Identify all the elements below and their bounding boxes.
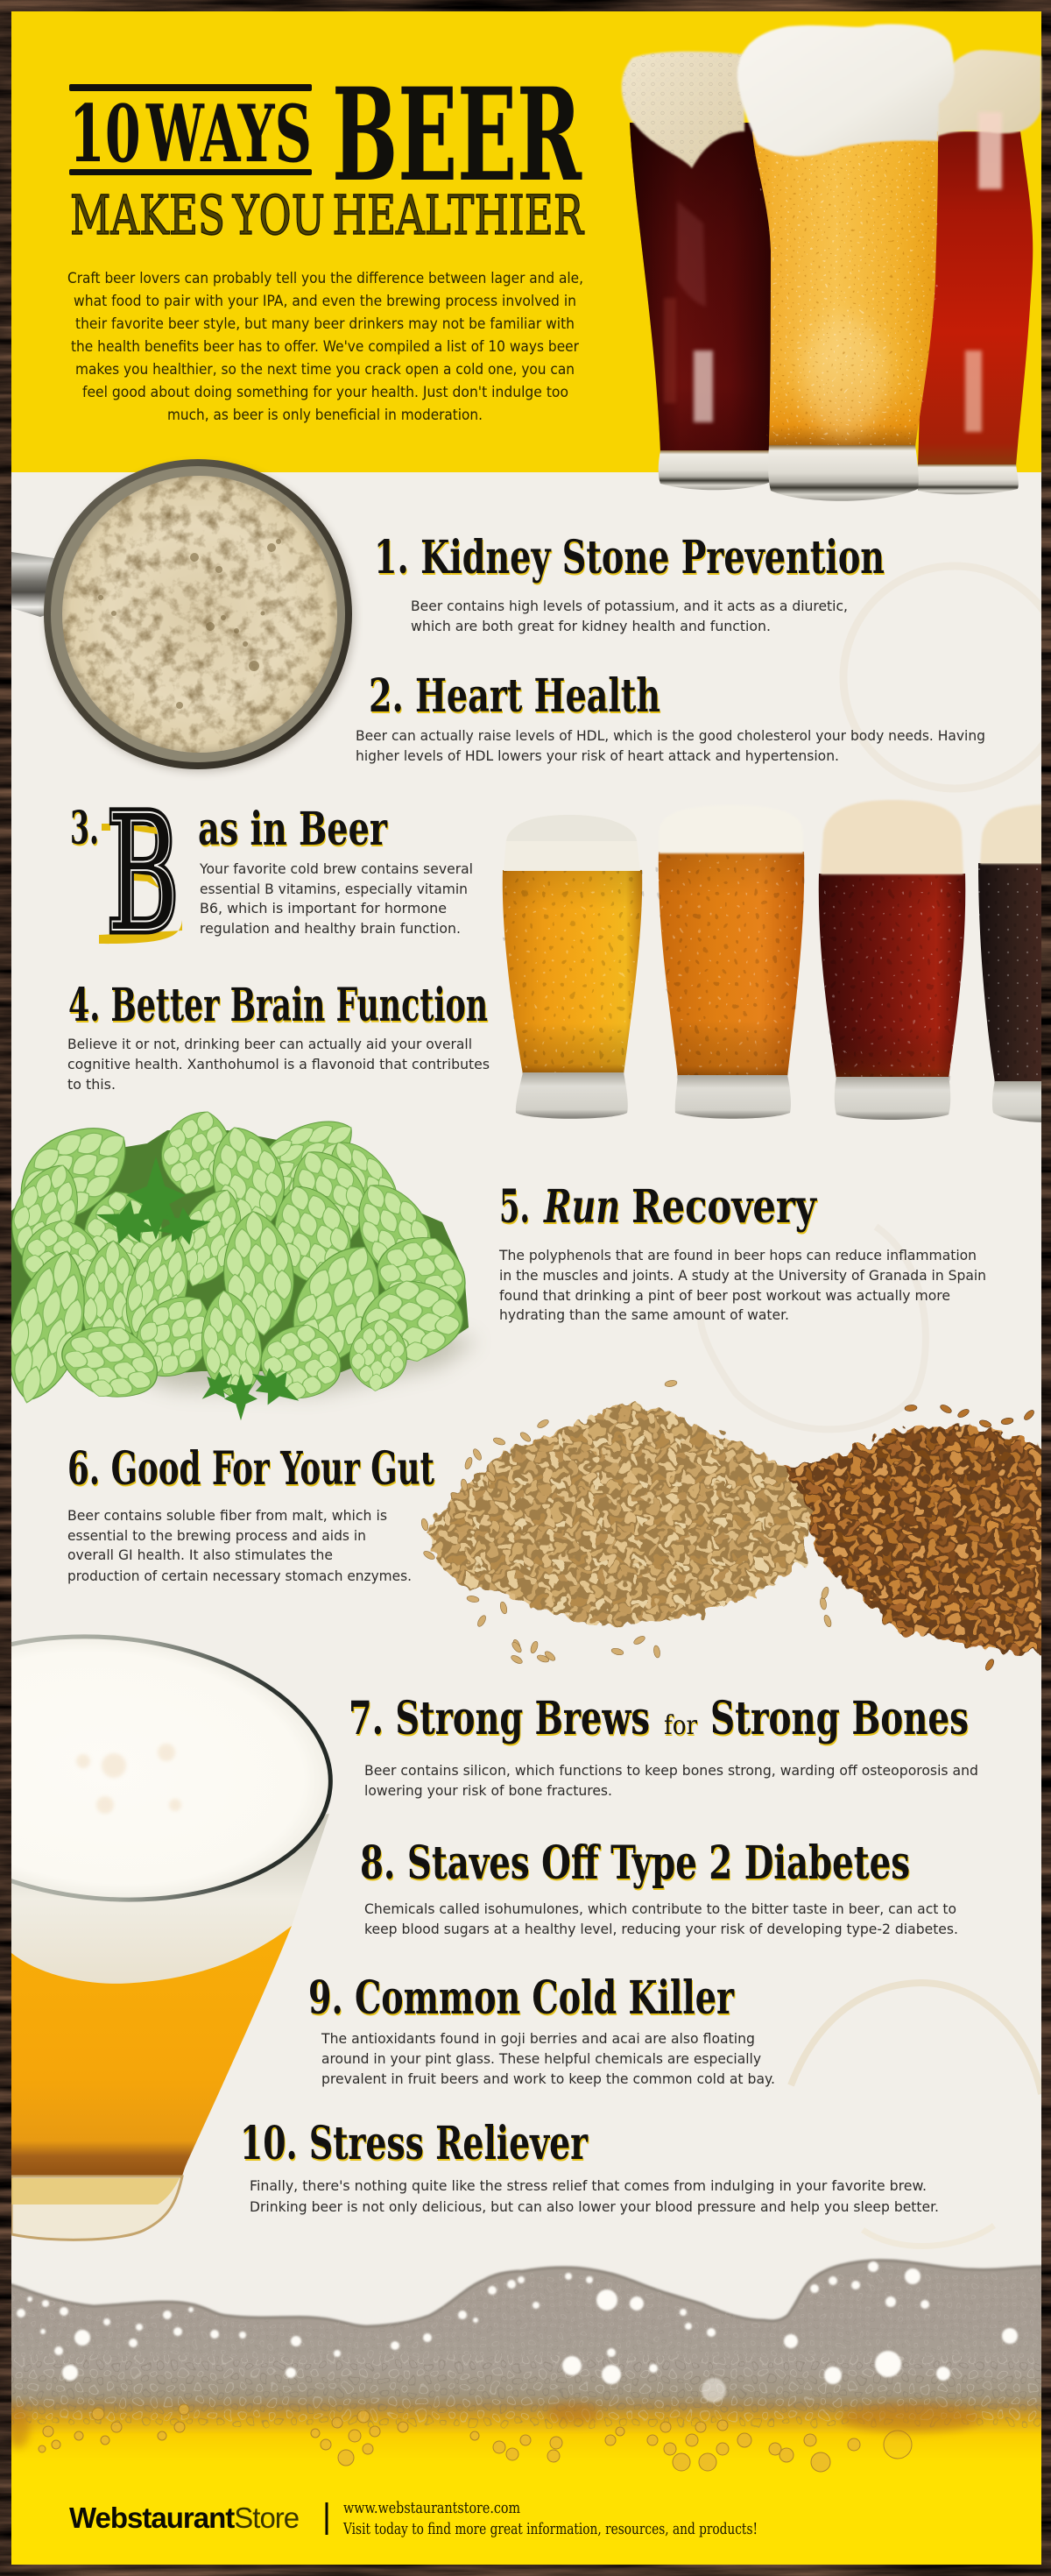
- body 3: essential B vitamins, especially vitamin: [200, 881, 468, 897]
- mug from above: [11, 459, 355, 772]
- orange glass: [655, 852, 805, 1119]
- foam warm specks: [76, 1744, 181, 1814]
- heading 9: 9. Common Cold Killer: [308, 1971, 734, 2025]
- big letter B: B: [107, 781, 179, 968]
- heading 4: 4. Better Brain Function: [68, 979, 488, 1032]
- heading 3 number: 3.: [70, 802, 99, 855]
- intro paragraph: makes you healthier, so the next time you crack open a cold one, you can: [75, 361, 575, 379]
- body 8: Chemicals called isohumulones, which contribute to the bitter taste in beer, can act to: [364, 1900, 956, 1917]
- row of four beer glasses: [503, 800, 1051, 1122]
- body 3: regulation and healthy brain function.: [200, 920, 461, 937]
- body 5: in the muscles and joints. A study at the University of Granada in Spain: [499, 1267, 986, 1284]
- body 7: [364, 1762, 978, 1799]
- foam and beer gradient: [0, 2261, 1051, 2576]
- scattered grains: [420, 1379, 1035, 1672]
- heading 5: 5.: [499, 1180, 530, 1234]
- footer url: www.webstaurantstore.com: [343, 2499, 520, 2517]
- large pint glass: [0, 1618, 342, 2240]
- stout glass: [978, 804, 1041, 1122]
- title: beer: BEER: [332, 60, 582, 210]
- item 5: run recovery: [498, 1180, 986, 1323]
- header band: [11, 11, 1041, 472]
- heading 7: [349, 1692, 969, 1745]
- title: [69, 60, 585, 247]
- foam surface and rim: [11, 1634, 333, 1902]
- foam fine bubbles: [11, 2264, 1041, 2366]
- body 3: B6, which is important for hormone: [200, 900, 447, 916]
- body 10: [250, 2177, 939, 2215]
- big letter B: [99, 781, 182, 968]
- base golden sediment: [11, 2178, 180, 2204]
- header beer glasses: [622, 25, 1041, 501]
- body 8: [364, 1900, 958, 1937]
- dark red glass: [819, 800, 965, 1120]
- body 2: higher levels of HDL lowers your risk of heart attack and hypertension.: [356, 747, 839, 764]
- beer foam footer band: [0, 2261, 1051, 2576]
- body 3: Your favorite cold brew contains several: [199, 860, 473, 877]
- pint glass base: [11, 2176, 182, 2240]
- body 5: found that drinking a pint of beer post workout was actually more: [499, 1287, 950, 1304]
- body 4: cognitive health. Xanthohumol is a flavonoid that contributes: [67, 1056, 490, 1072]
- intro paragraph: what food to pair with your IPA, and even the brewing process involved in: [74, 293, 576, 310]
- webstaurantstore logo: WebstaurantStore: [69, 2502, 299, 2534]
- body 5: hydrating than the same amount of water.: [499, 1306, 789, 1323]
- mug handle: [11, 552, 54, 617]
- item 4: brain function: [67, 979, 490, 1093]
- item 8: diabetes: [360, 1836, 958, 1937]
- roasted malt pile: [784, 1426, 1051, 1655]
- big letter B: B: [107, 781, 179, 968]
- coffee ring stains: [701, 566, 1051, 2247]
- heading 1: 1. Kidney Stone Prevention: [374, 531, 885, 584]
- intro paragraph: Craft beer lovers can probably tell you the difference between lager and ale,: [67, 270, 583, 287]
- heading 7: 7. Strong Brews: [349, 1692, 650, 1745]
- body 7: Beer contains silicon, which functions to keep bones strong, warding off osteoporosis and: [364, 1762, 978, 1779]
- item 1: kidney stones: [374, 531, 885, 634]
- item 6: gut: [67, 1442, 434, 1584]
- body 4: [67, 1036, 490, 1093]
- malt grain piles: [420, 1379, 1051, 1672]
- title rule bottom: [69, 169, 312, 175]
- intro paragraph: much, as beer is only beneficial in moderation.: [167, 407, 483, 424]
- lager glass: [737, 25, 955, 501]
- footer: [69, 2499, 758, 2538]
- heading 7: for: [664, 1710, 698, 1741]
- body 8: keep blood sugars at a healthy level, reducing your risk of developing type-2 diabetes.: [364, 1921, 958, 1937]
- dark beer glass: [622, 52, 774, 490]
- white bubbles: [17, 2261, 1018, 2403]
- body 6: Beer contains soluble fiber from malt, which is: [67, 1507, 387, 1524]
- hop leaf: [96, 1157, 210, 1245]
- body 5: The polyphenols that are found in beer hops can reduce inflammation: [498, 1247, 977, 1263]
- title: 10 ways: 10 WAYS: [69, 88, 312, 180]
- body 9: [321, 2030, 775, 2087]
- body 6: production of certain necessary stomach enzymes.: [67, 1568, 412, 1584]
- hop cones: [0, 1103, 477, 1420]
- hops base silhouette: [11, 1130, 469, 1380]
- body 9: around in your pint glass. These helpful chemicals are especially: [321, 2050, 761, 2067]
- mug foam: [62, 476, 337, 753]
- amber hanging bubbles: [39, 2404, 912, 2472]
- foam collar: [11, 1814, 329, 1984]
- amber glass: [503, 815, 642, 1119]
- item 9: common cold: [308, 1971, 775, 2087]
- heading 7: Strong Bones: [710, 1692, 969, 1745]
- body 7: lowering your risk of bone fractures.: [364, 1782, 612, 1799]
- dark amber shading: [5, 2403, 981, 2448]
- body 6: essential to the brewing process and aids in: [67, 1527, 366, 1544]
- body 4: Believe it or not, drinking beer can actually aid your overall: [67, 1036, 472, 1052]
- item 3: b as in beer: [70, 781, 473, 968]
- heading 2: 2. Heart Health: [369, 669, 660, 723]
- intro paragraph: the health benefits beer has to offer. We've compiled a list of 10 ways beer: [71, 338, 579, 356]
- heading 5: [499, 1180, 817, 1234]
- body 2: Beer can actually raise levels of HDL, which is the good cholesterol your body needs. Having: [356, 727, 985, 744]
- mug shadow: [46, 464, 355, 772]
- intro paragraph: [67, 270, 583, 424]
- footer divider: [326, 2502, 328, 2535]
- body 9: prevalent in fruit beers and work to keep the common cold at bay.: [321, 2070, 775, 2087]
- title rule top: [69, 84, 312, 91]
- heading 6: 6. Good For Your Gut: [67, 1442, 434, 1496]
- heading 3 text: as in Beer: [198, 803, 387, 856]
- pale malt pile: [429, 1401, 811, 1626]
- mug rim: [44, 459, 352, 769]
- item 10: stress: [240, 2117, 939, 2215]
- body 10: Drinking beer is not only delicious, but can also lower your blood pressure and help you sleep better.: [250, 2198, 939, 2215]
- pint glass body and beer: [11, 1926, 292, 2182]
- heading 5: Recovery: [631, 1180, 817, 1234]
- body 1: Beer contains high levels of potassium, and it acts as a diuretic,: [411, 598, 848, 614]
- footer call to action: Visit today to find more great information, resources, and products!: [342, 2520, 758, 2538]
- intro paragraph: feel good about doing something for your health. Just don't indulge too: [82, 384, 568, 401]
- body 10: Finally, there's nothing quite like the stress relief that comes from indulging in your favorite brew.: [250, 2177, 927, 2194]
- item 2: heart health: [356, 669, 985, 764]
- title: makes you healthier: MAKES YOU HEALTHIER: [70, 183, 585, 247]
- intro paragraph: their favorite beer style, but many beer drinkers may not be familiar with: [75, 315, 575, 333]
- item 7: bones: [349, 1692, 978, 1799]
- body 1: [411, 598, 848, 634]
- heading 5: Run: [543, 1180, 620, 1234]
- body 1: which are both great for kidney health and function.: [411, 618, 771, 634]
- foam lower bubbles: [11, 2357, 1041, 2425]
- hops shadow: [147, 1329, 476, 1404]
- body 5: [498, 1247, 986, 1323]
- body 6: [67, 1507, 412, 1584]
- yellow header background: [11, 11, 1041, 472]
- heading 10: 10. Stress Reliever: [240, 2117, 588, 2170]
- paper panel: [11, 472, 1041, 2400]
- body 6: overall GI health. It also stimulates the: [67, 1546, 333, 1563]
- body 2: [356, 727, 985, 764]
- red beer glass: [918, 50, 1041, 494]
- body 3: [199, 860, 473, 937]
- lower hop leaf: [201, 1368, 300, 1421]
- body 9: The antioxidants found in goji berries and acai are also floating: [321, 2030, 755, 2047]
- body 4: to this.: [67, 1076, 116, 1093]
